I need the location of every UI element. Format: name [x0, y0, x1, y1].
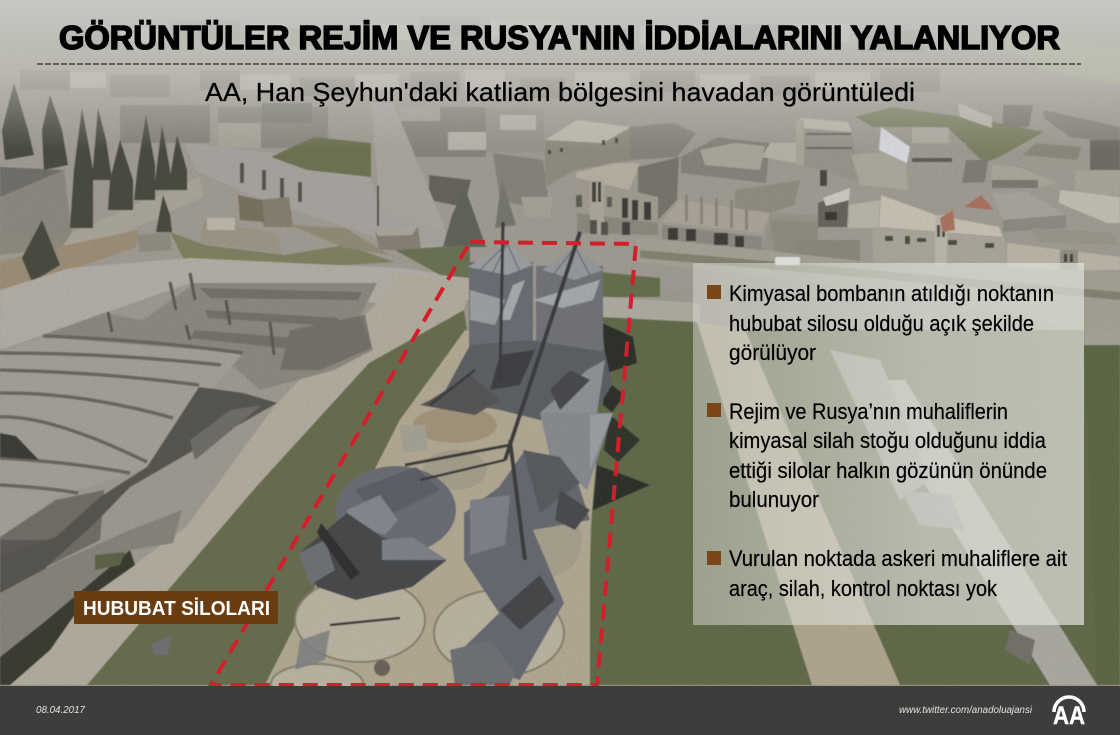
footer bar [0, 686, 1120, 735]
bullet 2: bulunuyor [729, 487, 819, 512]
bullet 1: Kimyasal bombanın atıldığı noktanın [729, 281, 1054, 306]
label: grain silos: HUBUBAT SİLOLARI [83, 597, 270, 620]
ground, road and grass [0, 245, 1120, 685]
panel: key findings [693, 263, 1084, 625]
bullet 3 [707, 546, 1067, 601]
bullet 3: araç, silah, kontrol noktası yok [729, 576, 998, 601]
silo highlight dashed frame [211, 242, 636, 685]
distant haze [0, 0, 1120, 150]
town mid [400, 107, 486, 157]
town buildings [0, 0, 1120, 330]
roadway along front of town [636, 238, 1120, 330]
bullet 1: hububat silosu olduğu açık şekilde [729, 311, 1034, 336]
roads left of silos [371, 103, 445, 232]
title: GÖRÜNTÜLER REJİM VE RUSYA'NIN İDDİALARINI YALANLIYOR [59, 19, 1060, 56]
left building and wall [0, 167, 72, 238]
subtitle: AA, Han Şeyhun'daki katliam bölgesini havadan görüntüledi [205, 77, 915, 107]
concrete frame [662, 200, 770, 233]
label: grain silos [74, 591, 278, 624]
title divider [37, 63, 1081, 65]
arched building [575, 163, 640, 190]
far rows [20, 16, 940, 98]
bullet 2: ettiği silolar halkın gözünün önünde [729, 458, 1047, 483]
cypress trees [2, 83, 516, 282]
mid left block [218, 107, 328, 148]
bullet 2 [707, 399, 1047, 512]
bullet 3: Vurulan noktada askeri muhaliflere ait [729, 546, 1067, 571]
bullet 2: Rejim ve Rusya’nın muhaliflerin [729, 399, 1008, 424]
demolished warehouse [0, 273, 377, 685]
bullet 2: kimyasal silah stoğu olduğunu iddia [729, 428, 1047, 453]
huts [200, 220, 282, 253]
twitter address: www.twitter.com/anadoluajansi [899, 704, 1033, 716]
icon: Anadolu Agency logo: AA [1053, 702, 1085, 730]
date: 08.04.2017 [36, 704, 86, 716]
grain silos [150, 222, 650, 704]
bullet 1 [707, 281, 1054, 365]
bullet 1: görülüyor [729, 340, 816, 365]
